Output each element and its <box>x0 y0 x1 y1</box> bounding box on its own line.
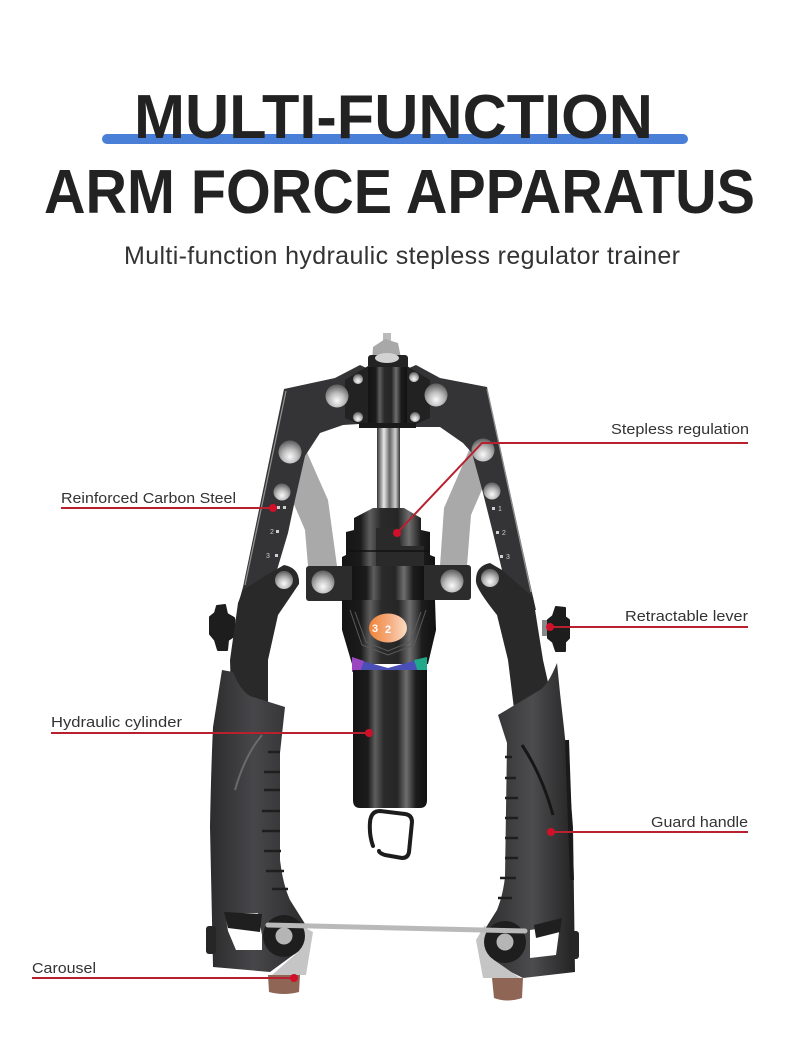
callout: Carousel <box>32 960 298 982</box>
arm scale markings left: 3 <box>266 553 270 560</box>
callout: Stepless regulation <box>393 421 749 537</box>
callout: Guard handle <box>547 814 748 836</box>
gray inner braces <box>290 448 486 566</box>
right guard handle <box>480 663 575 978</box>
left upper arm <box>238 365 375 605</box>
lower body shell <box>342 600 436 664</box>
left carousel base <box>206 912 313 994</box>
top bolt <box>368 333 408 369</box>
piston rod <box>377 425 400 515</box>
right carousel base <box>476 918 579 1000</box>
top hub clamp <box>345 366 430 428</box>
callout: Reinforced Carbon Steel: Reinforced Carbon Steel <box>61 490 236 507</box>
heading line 1: MULTI-FUNCTION <box>134 83 653 152</box>
hook <box>370 811 412 858</box>
title <box>44 83 755 227</box>
heading underline bar <box>102 134 688 144</box>
callout: Guard handle: Guard handle <box>651 814 748 831</box>
arm scale markings right <box>492 506 510 561</box>
arm scale markings right: 1 <box>498 506 502 513</box>
arm scale markings left <box>266 506 286 560</box>
grip ridges right <box>498 757 518 898</box>
lower arm plates <box>230 563 552 725</box>
adjustment dial: 2 <box>385 624 391 636</box>
mounting bracket <box>306 565 471 601</box>
left knob <box>210 605 240 650</box>
arm scale markings left: 2 <box>270 529 274 536</box>
arm scale markings right: 3 <box>506 554 510 561</box>
callout: Retractable lever: Retractable lever <box>625 608 748 625</box>
arm edge highlights <box>245 389 531 592</box>
callout: Reinforced Carbon Steel <box>61 490 277 512</box>
shell contour lines <box>350 610 426 655</box>
subtitle: Multi-function hydraulic stepless regulator trainer <box>124 242 680 270</box>
steel crossbar <box>268 925 525 931</box>
callout: Carousel: Carousel <box>32 960 96 977</box>
heading line 2: ARM FORCE APPARATUS <box>44 158 755 227</box>
colored band <box>352 657 427 674</box>
adjustment dial: 3 <box>372 623 378 635</box>
adjustment dial <box>369 614 407 642</box>
arm scale markings right: 2 <box>502 530 506 537</box>
callout: Retractable lever <box>546 608 748 631</box>
product illustration: arm force trainer <box>206 333 579 1000</box>
callout: Stepless regulation: Stepless regulation <box>611 421 749 438</box>
right knob <box>542 607 569 651</box>
metal screws <box>274 372 500 594</box>
callout: Hydraulic cylinder <box>51 714 373 737</box>
right upper arm <box>400 365 536 610</box>
grip ridges left <box>262 752 288 889</box>
callout: Hydraulic cylinder: Hydraulic cylinder <box>51 714 182 731</box>
cylinder head <box>342 508 435 600</box>
left guard handle <box>210 670 307 972</box>
hydraulic cylinder tube <box>353 670 427 808</box>
